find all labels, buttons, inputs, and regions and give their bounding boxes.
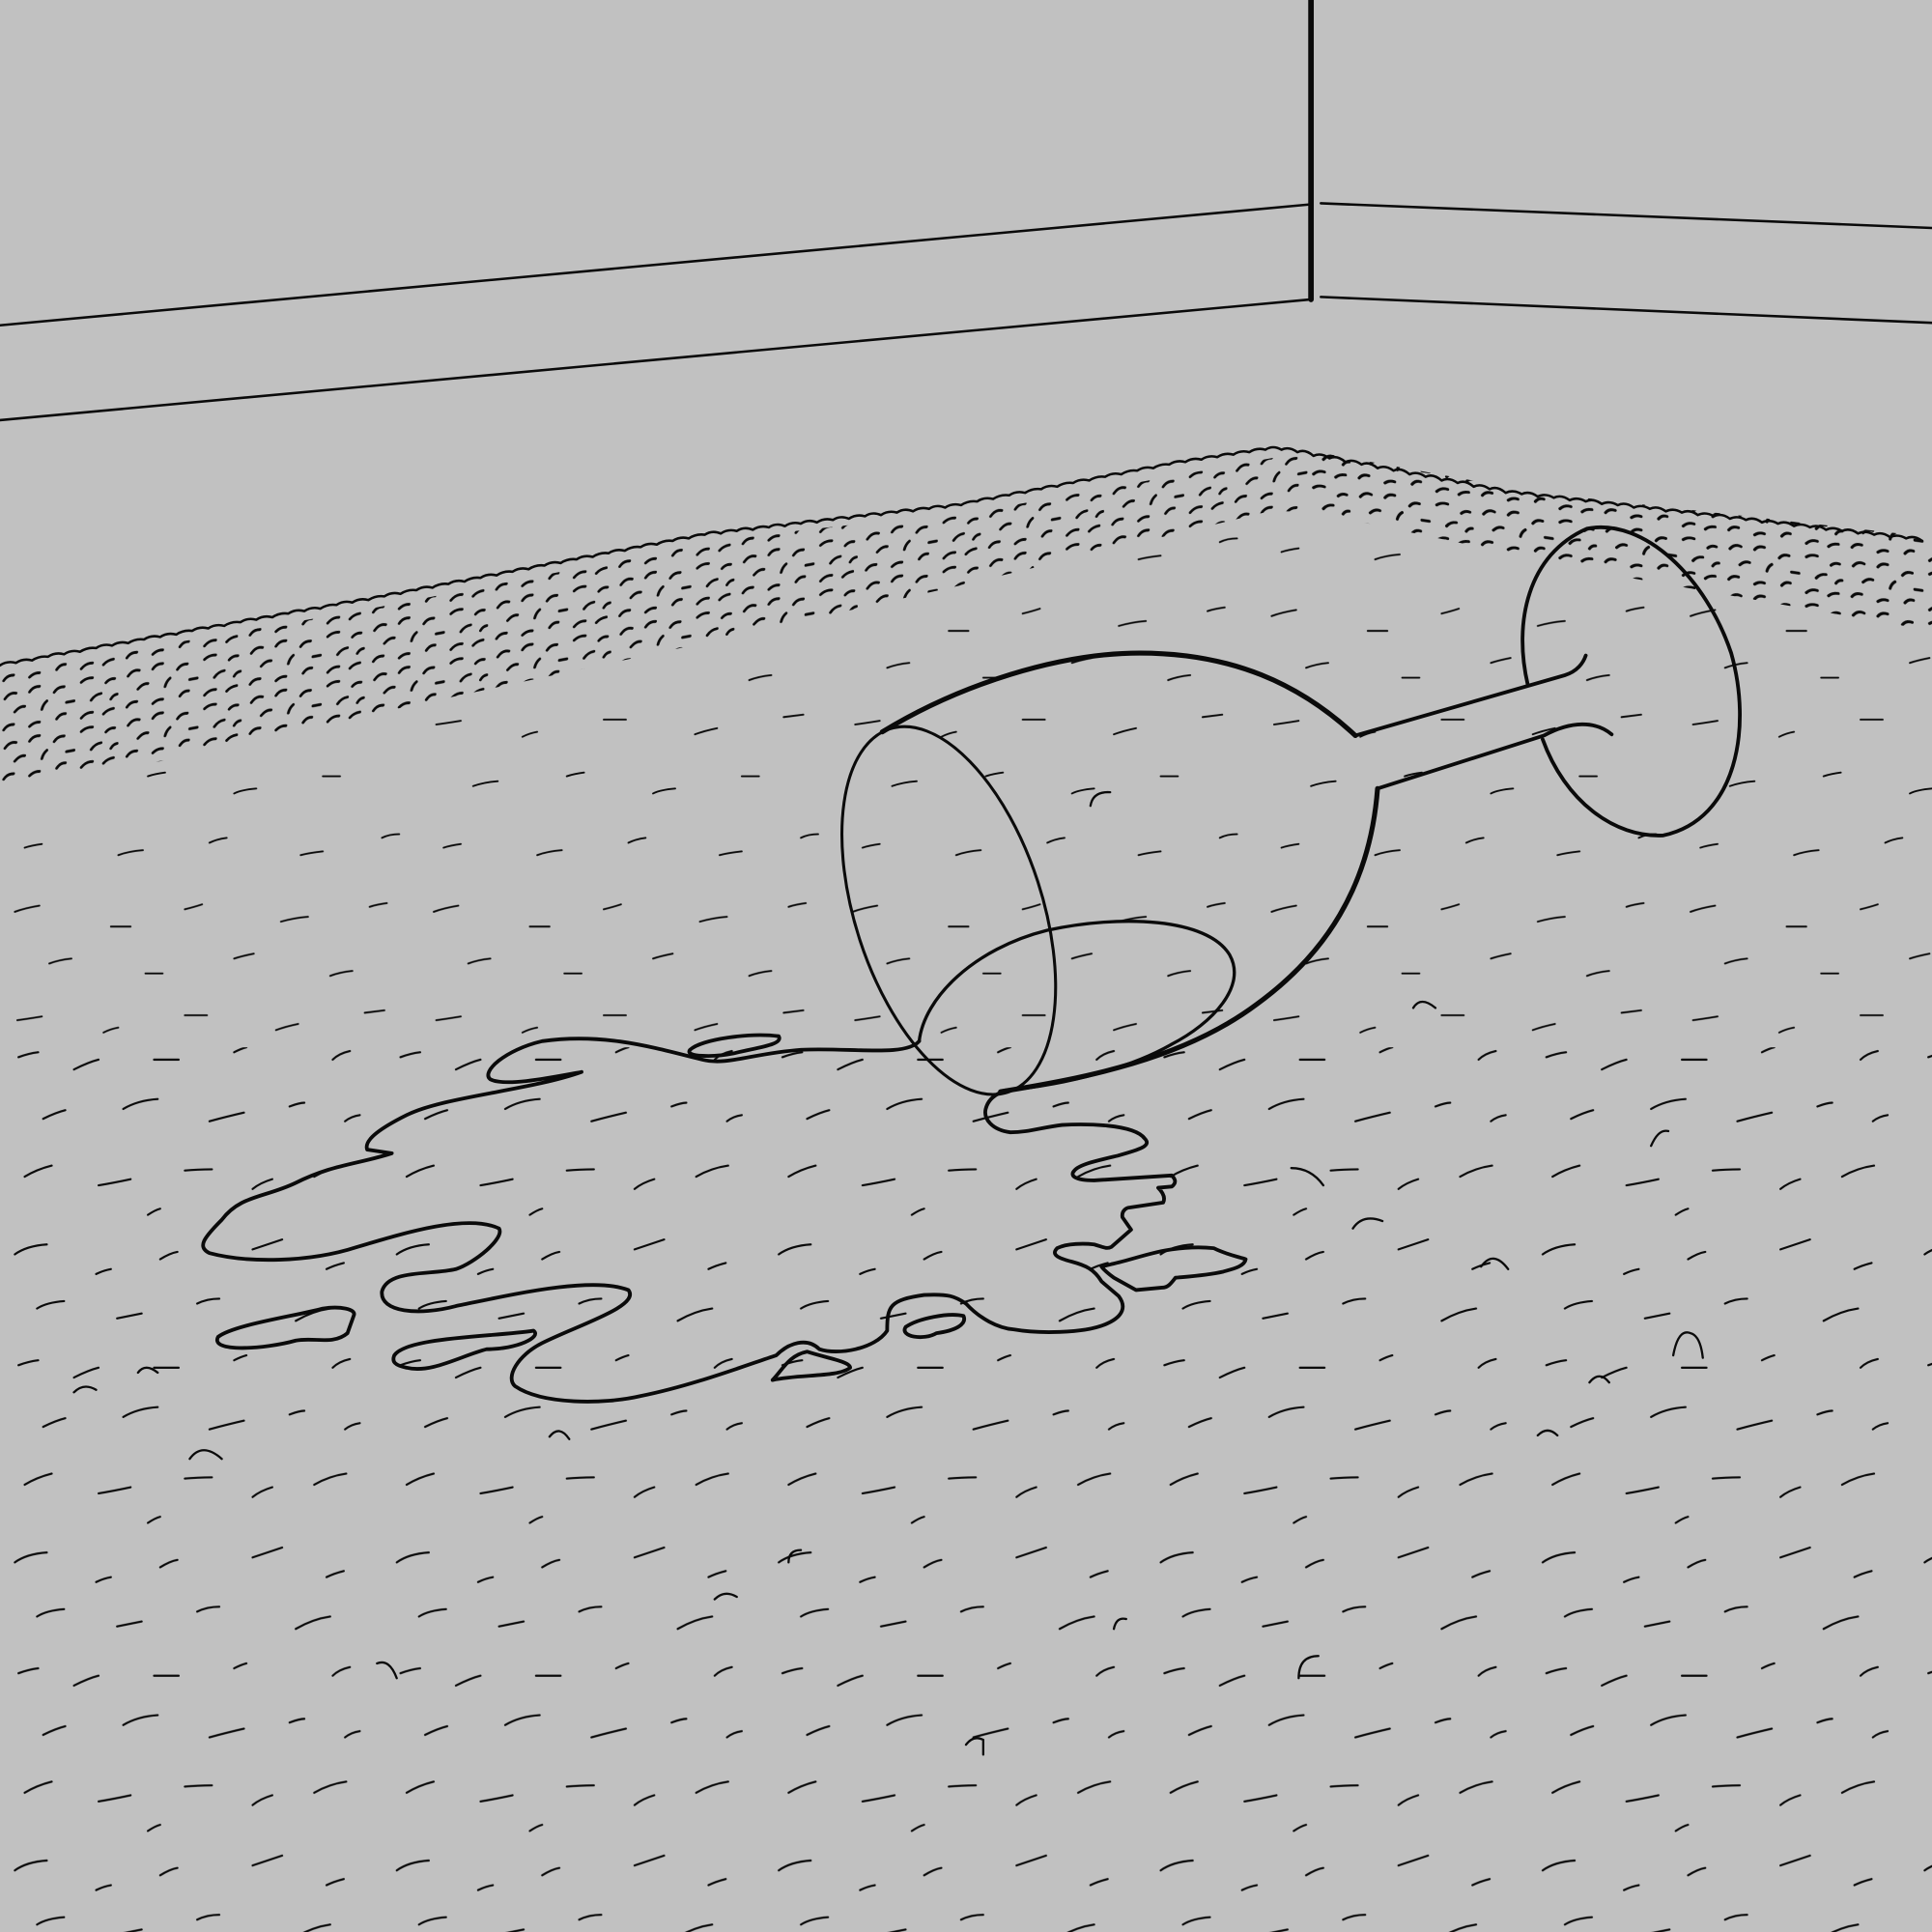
- carpet edge pile texture, left wall: [2, 456, 1308, 781]
- glass rim: [801, 700, 1096, 1122]
- spilled wine puddle: [203, 1036, 1246, 1402]
- carpet curled tufts: [74, 792, 1703, 1754]
- puddle droplets: [217, 1036, 1246, 1380]
- glass foot: [1522, 527, 1740, 836]
- carpet floor texture, far: [14, 537, 1932, 1034]
- puddle outline: [203, 1038, 1175, 1402]
- carpet edge pile texture, right wall: [1312, 454, 1932, 626]
- wall corner and baseboard: [0, 0, 1932, 420]
- wine inside glass: [920, 922, 1235, 1091]
- carpet floor texture, near: [0, 1047, 1932, 1932]
- glass bowl: [882, 653, 1378, 1092]
- carpet far edge: [0, 447, 1922, 666]
- wine glass: [801, 527, 1740, 1122]
- glass stem: [1355, 656, 1611, 788]
